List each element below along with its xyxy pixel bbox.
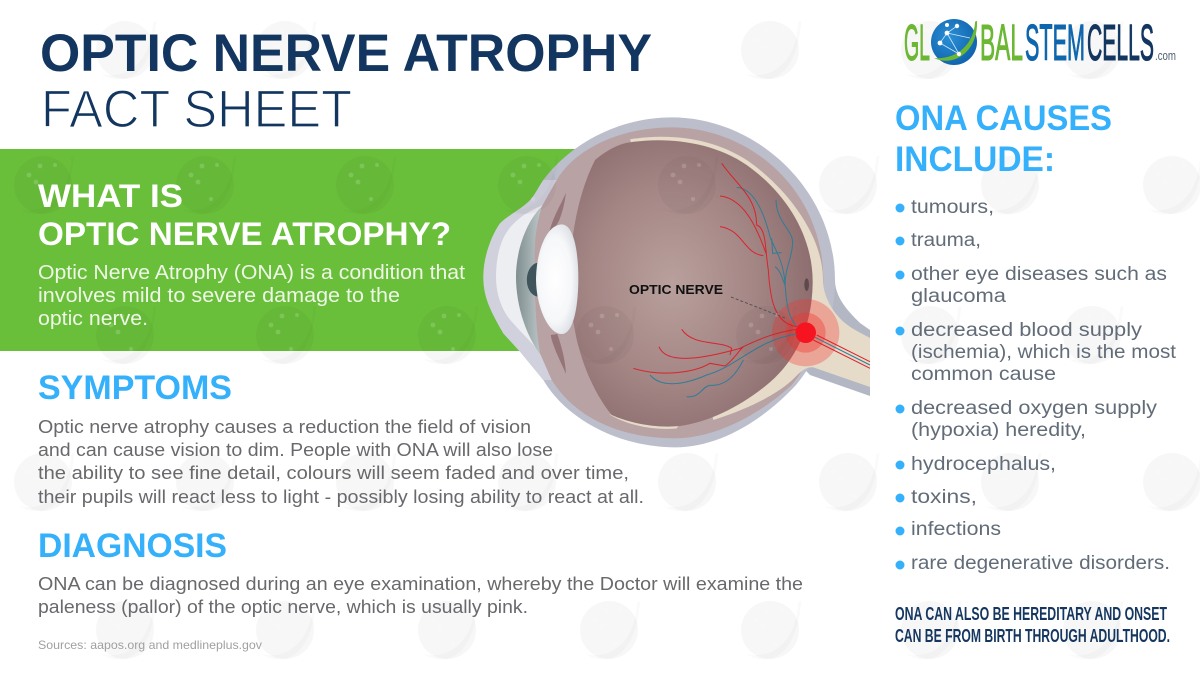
causes heading: ONA CAUSES xyxy=(895,99,1112,138)
diagnosis section xyxy=(38,527,803,617)
logo xyxy=(904,14,1176,71)
eye diagram xyxy=(483,117,870,447)
diagnosis section: paleness (pallor) of the optic nerve, which is usually pink. xyxy=(38,597,528,617)
lens xyxy=(536,224,578,334)
causes list: (hypoxia) heredity, xyxy=(911,420,1086,441)
hereditary note xyxy=(895,604,1170,646)
logo: .com xyxy=(1155,48,1176,63)
what is heading and definition: Optic Nerve Atrophy (ONA) is a condition that xyxy=(38,262,465,284)
logo: BAL xyxy=(980,14,1023,71)
optic nerve label: OPTIC NERVE xyxy=(629,282,723,297)
sources: Sources: aapos.org and medlineplus.gov xyxy=(38,638,262,652)
causes list: decreased blood supply xyxy=(911,320,1143,341)
title: OPTIC NERVE ATROPHY xyxy=(40,24,652,83)
symptoms section xyxy=(38,369,644,507)
causes list: infections xyxy=(911,519,1001,540)
causes list: tumours, xyxy=(911,197,994,218)
logo: STEM xyxy=(1025,14,1085,71)
symptoms section: and can cause vision to dim. People with ONA will also lose xyxy=(38,440,553,460)
symptoms section: their pupils will react less to light - possibly losing ability to react at all. xyxy=(38,487,644,507)
symptoms section: Optic nerve atrophy causes a reduction the field of vision xyxy=(38,417,531,437)
causes list: rare degenerative disorders. xyxy=(911,553,1170,574)
ciliary muscle xyxy=(548,193,566,374)
what is heading and definition: WHAT IS xyxy=(38,178,183,214)
cornea xyxy=(496,205,543,353)
causes list: hydrocephalus, xyxy=(911,454,1056,475)
diagnosis section: ONA can be diagnosed during an eye examination, whereby the Doctor will examine the xyxy=(38,574,803,594)
lower cream strip xyxy=(609,414,680,429)
optic disc glow xyxy=(772,299,839,366)
green banner xyxy=(0,149,600,351)
causes list: toxins, xyxy=(911,487,977,508)
eyeball outer shell xyxy=(483,117,835,447)
diagnosis section: DIAGNOSIS xyxy=(38,527,227,565)
causes heading xyxy=(895,99,1112,179)
choroid layer xyxy=(534,127,823,438)
title xyxy=(40,24,652,139)
what is heading and definition: involves mild to severe damage to the xyxy=(38,285,400,307)
symptoms section: SYMPTOMS xyxy=(38,369,232,407)
iris xyxy=(516,205,543,355)
causes list xyxy=(896,197,1177,574)
optic nerve sheath xyxy=(747,280,870,396)
cornea outer lavender xyxy=(483,180,560,380)
cream sclera band xyxy=(630,137,870,420)
causes heading: INCLUDE: xyxy=(895,140,1055,179)
what is heading and definition xyxy=(38,178,465,330)
what is heading and definition: optic nerve. xyxy=(38,308,148,330)
red arteries xyxy=(633,163,870,373)
causes list: glaucoma xyxy=(911,286,1006,307)
what is heading and definition: OPTIC NERVE ATROPHY? xyxy=(38,216,451,252)
blue veins xyxy=(650,187,870,397)
pupil xyxy=(527,263,537,297)
small dark spot xyxy=(804,278,809,291)
optic nerve label xyxy=(629,282,785,318)
logo: GL xyxy=(904,14,930,71)
causes list: (ischemia), which is the most xyxy=(911,342,1177,363)
title: FACT SHEET xyxy=(41,80,352,139)
symptoms section: the ability to see fine detail, colours will seem faded and over time, xyxy=(38,463,629,483)
vitreous chamber xyxy=(570,140,813,427)
list bullets xyxy=(896,204,904,570)
causes list: decreased oxygen supply xyxy=(911,398,1158,419)
causes list: trauma, xyxy=(911,230,981,251)
causes list: other eye diseases such as xyxy=(911,264,1167,285)
logo globe icon xyxy=(931,19,977,65)
causes list: common cause xyxy=(911,364,1056,385)
